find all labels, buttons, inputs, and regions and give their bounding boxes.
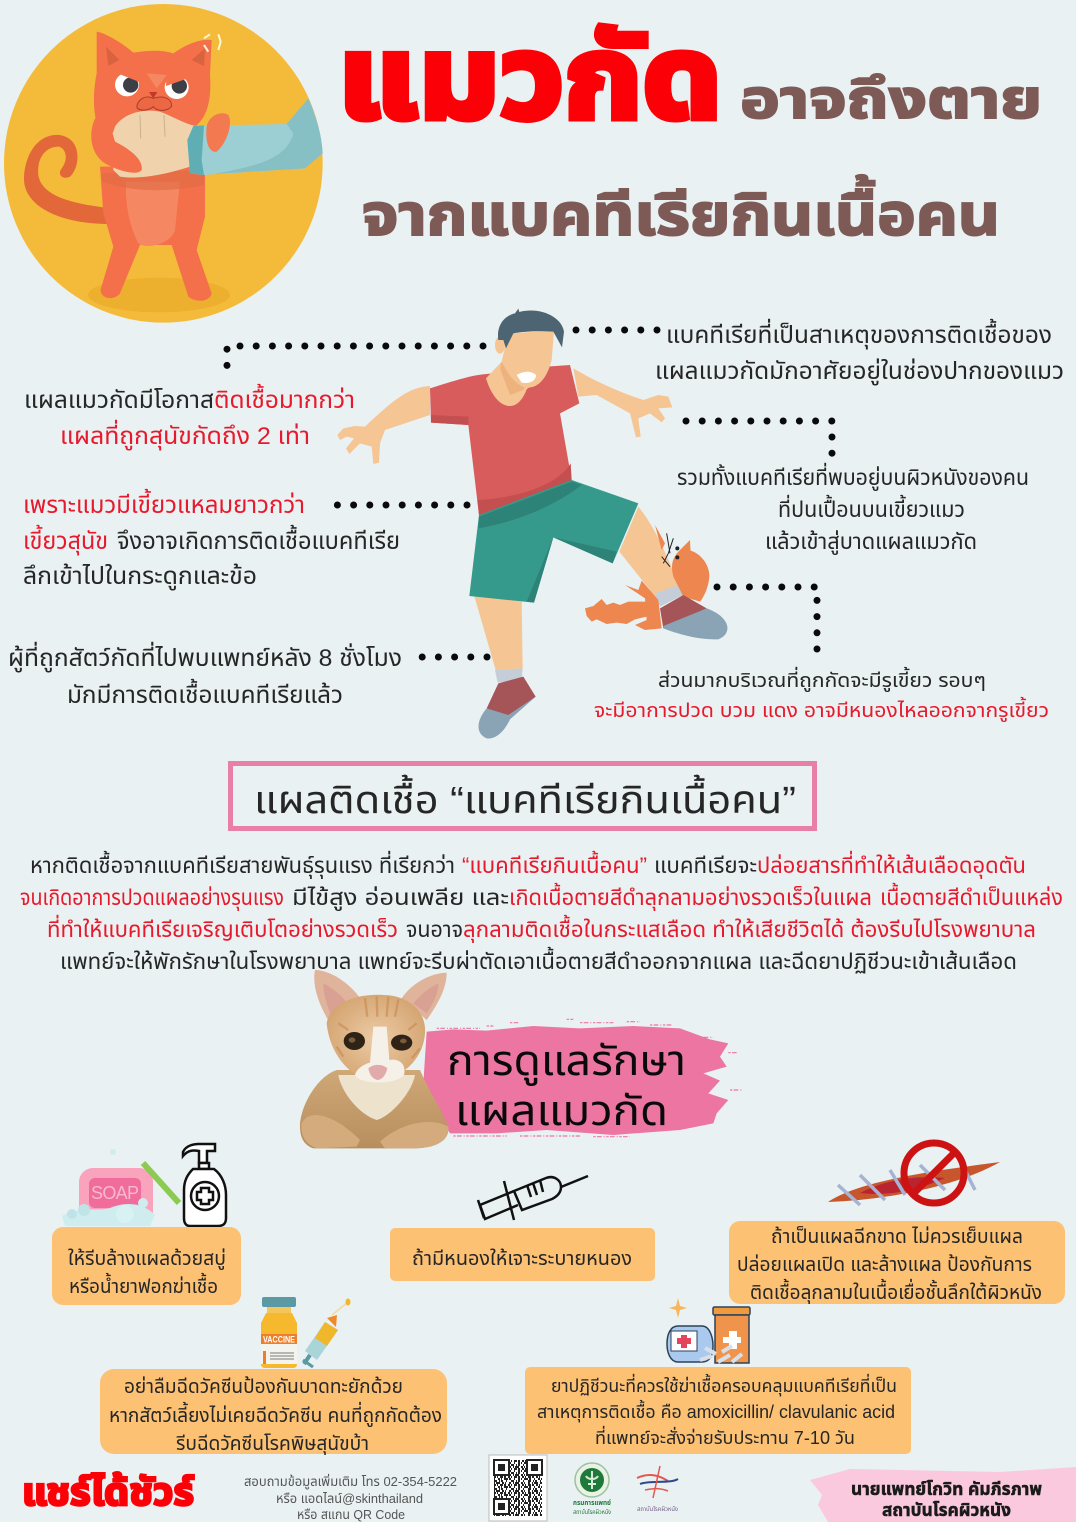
- callout: twice the infection risk: แผลแมวกัดมีโอกาส: [24, 387, 214, 414]
- logo: department of medical services: กรมการแพทย์: [573, 1499, 611, 1507]
- photo: ginger and white cat: [300, 970, 448, 1148]
- box: wash the wound: หรือน้ำยาฟอกฆ่าเชื้อ: [69, 1272, 218, 1298]
- footer: doctor credit on pink brush: นายแพทย์โกวิท คัมภีรภาพ: [851, 1479, 1042, 1499]
- title: อาจถึงตาย: อาจถึงตาย: [740, 70, 1042, 130]
- callout: twice the infection risk: แผลที่ถูกสุนัขกัดถึง 2 เท่า: [60, 419, 310, 451]
- heading: care of cat bite wounds: การดูแลรักษา: [447, 1037, 686, 1086]
- text block: flesh-eating infection description: มีไข้สูง อ่อนเพลีย และ: [292, 885, 509, 911]
- box: tetanus and rabies vaccination: อย่าลืมฉีดวัคซีนป้องกันบาดทะยักด้วย: [124, 1375, 403, 1398]
- callout: bacteria on human skin: [677, 462, 1029, 555]
- text block: flesh-eating infection description: จนเกิดอาการปวดแผลอย่างรุนแรง: [20, 885, 284, 911]
- box: tetanus and rabies vaccination: รีบฉีดวัคซีนโรคพิษสุนัขบ้า: [176, 1432, 369, 1455]
- logo: institute of dermatology: [637, 1466, 678, 1513]
- box: drain the pus: ถ้ามีหนองให้เจาะระบายหนอง: [412, 1247, 632, 1270]
- box: do not stitch torn wounds: ปล่อยแผลเปิด และล้างแผล ป้องกันการ: [737, 1253, 1032, 1276]
- box: tetanus and rabies vaccination: หากสัตว์เลี้ยงไม่เคยฉีดวัคซีน คนที่ถูกกัดต้อง: [109, 1401, 442, 1428]
- text block: flesh-eating infection description: หากติดเชื้อจากแบคทีเรียสายพันธุ์รุนแรง ที่เรียกว่า: [30, 850, 455, 879]
- box: drain the pus: [390, 1228, 655, 1281]
- footer: contact information: สอบถามข้อมูลเพิ่มเติม โทร 02-354-5222: [244, 1473, 457, 1489]
- logo: institute of dermatology: สถาบันโรคผิวหนัง: [637, 1505, 678, 1513]
- box: do not stitch torn wounds: ติดเชื้อลุกลามในเนื้อเยื่อชั้นลึกใต้ผิวหนัง: [750, 1278, 1042, 1304]
- callout: bacteria in cat's mouth: [655, 318, 1064, 386]
- dotted leader: top right: [576, 326, 658, 334]
- callout: bacteria on human skin: รวมทั้งแบคทีเรียที่พบอยู่บนผิวหนังของคน: [677, 462, 1029, 491]
- callout: twice the infection risk: ติดเชื้อมากกว่า: [214, 383, 355, 414]
- box: antibiotics: ที่แพทย์จะสั่งจ่ายรับประทาน 7-10 วัน: [595, 1425, 855, 1448]
- icon: vaccine syringe: [303, 1298, 350, 1367]
- text block: flesh-eating infection description: ปล่อยสารที่ทำให้เส้นเลือดอุดตัน: [757, 850, 1026, 879]
- footer: contact information: [244, 1473, 457, 1522]
- dotted leader: left middle: [322, 502, 467, 508]
- box: antibiotics: ยาปฏิชีวนะที่ควรใช้ฆ่าเชื้อครอบคลุมแบคทีเรียที่เป็น: [551, 1373, 897, 1397]
- icon: medicine bottles and pills: [667, 1298, 750, 1363]
- illustration: man bitten by cat: [337, 309, 727, 738]
- callout: long sharp fangs: เพราะแมวมีเขี้ยวแหลมยาวกว่า: [23, 488, 305, 519]
- icon: vaccine vial: VACCINE: [263, 1334, 295, 1344]
- icon: stitched wound with prohibition sign: [828, 1143, 1000, 1205]
- callout: long sharp fangs: เขี้ยวสุนัข: [23, 524, 108, 556]
- text block: flesh-eating infection description: [20, 850, 1063, 974]
- callout: long sharp fangs: [23, 488, 400, 591]
- footer: share brand: แชร์ได้ชัวร์: [22, 1472, 194, 1514]
- box: tetanus and rabies vaccination: [100, 1369, 447, 1455]
- logo: department of medical services: [573, 1463, 611, 1516]
- callout: bacteria on human skin: ที่ปนเปื้อนบนเขี้ยวแมว: [778, 494, 965, 522]
- box: wash the wound: [52, 1227, 241, 1305]
- box: wash the wound: ให้รีบล้างแผลด้วยสบู่: [68, 1247, 226, 1271]
- text block: flesh-eating infection description: เกิดเนื้อตายสีดำลุกลามอย่างรวดเร็วในแผล: [509, 882, 872, 911]
- callout: after 8 hours: ผู้ที่ถูกสัตว์กัดที่ไปพบแพทย์หลัง 8 ชั่งโมง: [8, 641, 402, 673]
- text block: flesh-eating infection description: เนื้อตายสีดำเป็นแหล่ง: [880, 882, 1063, 910]
- text block: flesh-eating infection description: ที่ทำให้แบคทีเรียเจริญเติบโตอย่างรวดเร็ว: [47, 914, 398, 942]
- callout: twice the infection risk: [24, 383, 355, 451]
- dotted leader: right middle: [686, 421, 832, 456]
- callout: bacteria in cat's mouth: แบคทีเรียที่เป็นสาเหตุของการติดเชื้อของ: [666, 318, 1052, 350]
- text block: flesh-eating infection description: ลุกลามติดเชื้อในกระแสเลือด ทำให้เสียชีวิตได้ ต้องรีบไปโรงพยาบาล: [463, 914, 1036, 943]
- callout: symptoms around the bite: จะมีอาการปวด บวม แดง อาจมีหนองไหลออกจากรูเขี้ยว: [594, 696, 1049, 723]
- icon: soap with bubbles: [62, 1149, 179, 1226]
- icon: syringe outline: [478, 1176, 588, 1220]
- heading: care of cat bite wounds: แผลแมวกัด: [455, 1087, 668, 1134]
- text block: flesh-eating infection description: แบคทีเรียจะ: [654, 853, 757, 878]
- dotted leader: right lower: [717, 587, 817, 660]
- callout: after 8 hours: [8, 641, 402, 709]
- footer: doctor credit on pink brush: สถาบันโรคผิวหนัง: [882, 1500, 1011, 1520]
- box: antibiotics: [525, 1367, 911, 1454]
- heading: care of cat bite wounds: [447, 1037, 686, 1134]
- callout: after 8 hours: มักมีการติดเชื้อแบคทีเรียแล้ว: [67, 678, 343, 709]
- heading box: flesh-eating bacteria: [230, 764, 814, 828]
- QR code: [489, 1455, 547, 1521]
- footer: doctor credit on pink brush: [810, 1467, 1076, 1522]
- callout: bacteria in cat's mouth: แผลแมวกัดมักอาศัยอยู่ในช่องปากของแมว: [655, 357, 1064, 386]
- text block: flesh-eating infection description: “แบคทีเรียกินเนื้อคน”: [462, 850, 647, 878]
- title: จากแบคทีเรียกินเนื้อคน: จากแบคทีเรียกินเนื้อคน: [362, 174, 1000, 248]
- box: do not stitch torn wounds: ถ้าเป็นแผลฉีกขาด ไม่ควรเย็บแผล: [771, 1225, 1023, 1248]
- text block: flesh-eating infection description: จนอาจ: [406, 917, 463, 942]
- logo: department of medical services: สถาบันโรคผิวหนัง: [573, 1509, 611, 1516]
- text block: flesh-eating infection description: แพทย์จะให้พักรักษาในโรงพยาบาล แพทย์จะรีบผ่าตัดเอาเนื้อตายสีดำออกจากแผล และฉีดยาปฏิชีวนะเข้าเส้นเลือด: [60, 946, 1017, 974]
- box: antibiotics: สาเหตุการติดเชื้อ คือ amoxicillin/ clavulanic acid: [537, 1399, 895, 1423]
- icon: soap with bubbles: SOAP: [91, 1183, 139, 1203]
- icon: antiseptic pump bottle: [183, 1144, 226, 1226]
- callout: bacteria on human skin: แล้วเข้าสู่บาดแผลแมวกัด: [765, 529, 977, 555]
- callout: symptoms around the bite: ส่วนมากบริเวณที่ถูกกัดจะมีรูเขี้ยว รอบๆ: [658, 666, 986, 693]
- illustration: angry cat biting hand: [4, 4, 323, 323]
- callout: long sharp fangs: จึงอาจเกิดการติดเชื้อแบคทีเรีย: [117, 524, 400, 555]
- dotted leader: left lower: [421, 654, 487, 660]
- icon: vaccine vial: [261, 1297, 297, 1368]
- title: แมวกัด: แมวกัด: [338, 13, 722, 143]
- heading box: flesh-eating bacteria: แผลติดเชื้อ “แบคทีเรียกินเนื้อคน”: [254, 774, 796, 822]
- footer: contact information: หรือ แอดไลน์@skinthailand: [276, 1491, 423, 1506]
- dotted leader: top left: [227, 346, 483, 378]
- callout: long sharp fangs: ลึกเข้าไปในกระดูกและข้อ: [23, 563, 257, 591]
- pink brush stroke behind care heading: [423, 1019, 742, 1137]
- callout: symptoms around the bite: [594, 666, 1049, 723]
- box: do not stitch torn wounds: [729, 1221, 1065, 1304]
- footer: contact information: หรือ สแกน QR Code: [297, 1507, 405, 1522]
